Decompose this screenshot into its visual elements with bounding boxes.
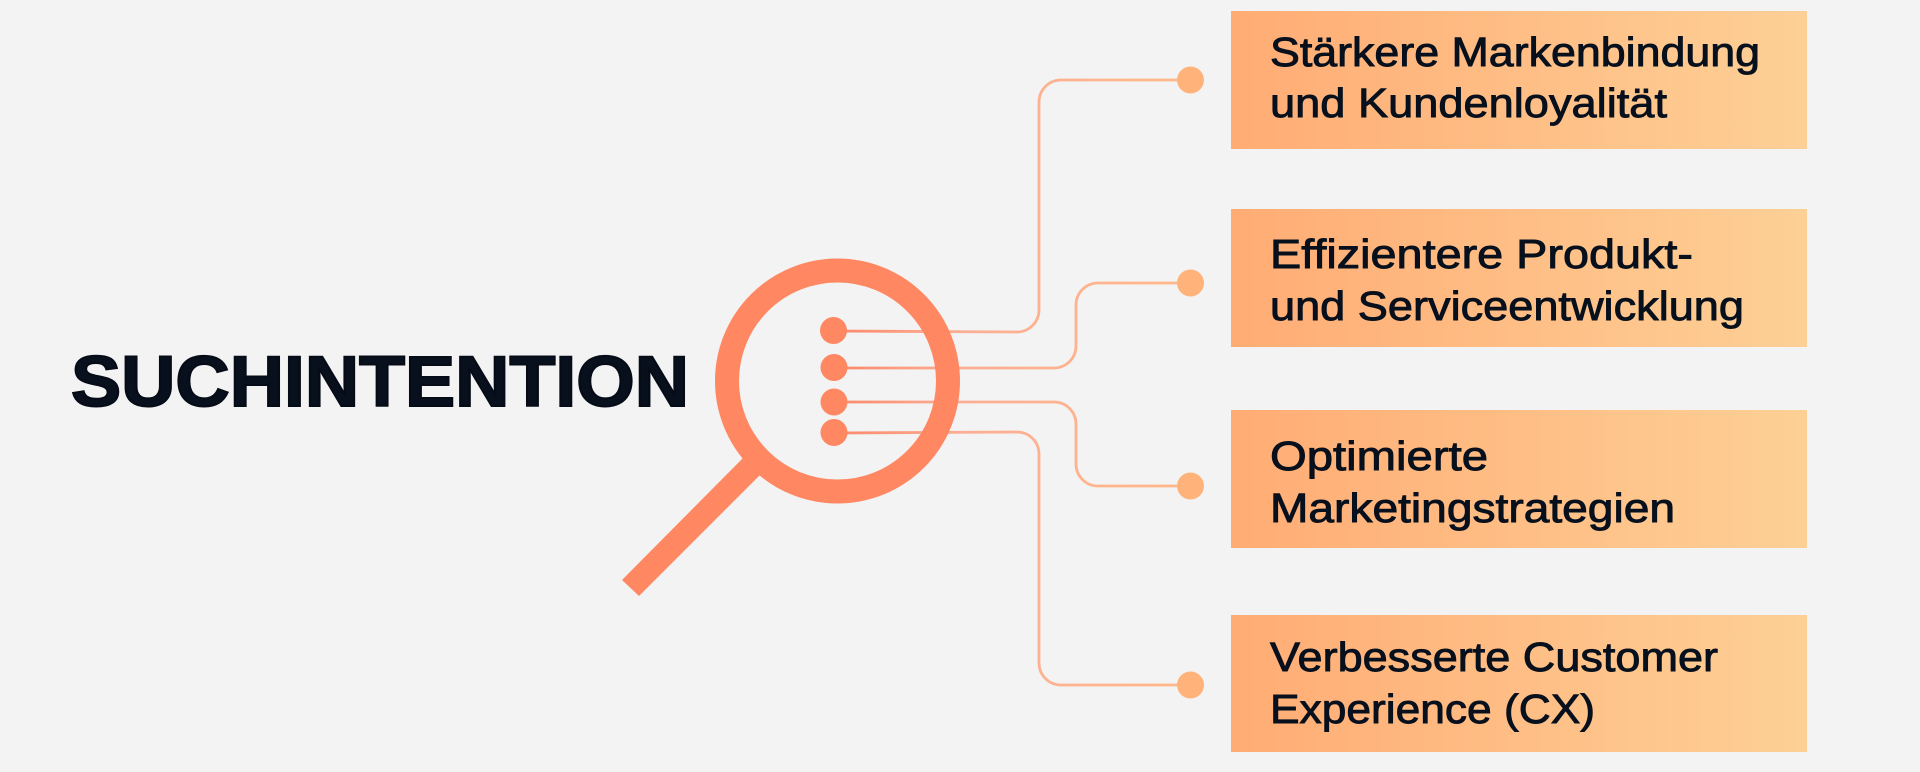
panel: Stärkere Markenbindung und Kundenloyalität: und Kundenloyalität	[1270, 80, 1668, 126]
endpoint dot 1	[1177, 66, 1204, 94]
title: Suchintention: SUCHINTENTION	[71, 343, 689, 422]
panel: Optimierte Marketingstrategien: Marketingstrategien	[1270, 485, 1675, 531]
endpoint dot 2	[1177, 270, 1204, 296]
panel: Optimierte Marketingstrategien	[1231, 410, 1807, 548]
panel: Effizientere Produkt- und Serviceentwicklung: und Serviceentwicklung	[1270, 283, 1744, 329]
endpoint dot 4	[1177, 672, 1204, 698]
panel: Verbesserte Customer Experience (CX)	[1231, 615, 1807, 752]
connector: line to box 3	[834, 402, 1190, 486]
panel: Optimierte Marketingstrategien: Optimierte	[1270, 433, 1488, 479]
connector: line to box 4	[834, 432, 1190, 685]
panel: Verbesserte Customer Experience (CX): Experience (CX)	[1270, 686, 1595, 732]
endpoint dot 3	[1177, 472, 1204, 500]
panel: Stärkere Markenbindung und Kundenloyalität	[1231, 11, 1807, 149]
connector: line to box 1	[834, 80, 1190, 332]
connector: line to box 2	[834, 283, 1190, 368]
panel: Effizientere Produkt- und Serviceentwicklung	[1231, 209, 1807, 347]
panel: Effizientere Produkt- und Serviceentwicklung: Effizientere Produkt-	[1270, 231, 1693, 277]
icon: magnifying glass	[622, 270, 948, 596]
panel: Stärkere Markenbindung und Kundenloyalität: Stärkere Markenbindung	[1270, 29, 1760, 75]
panel: Verbesserte Customer Experience (CX): Verbesserte Customer	[1270, 634, 1718, 680]
